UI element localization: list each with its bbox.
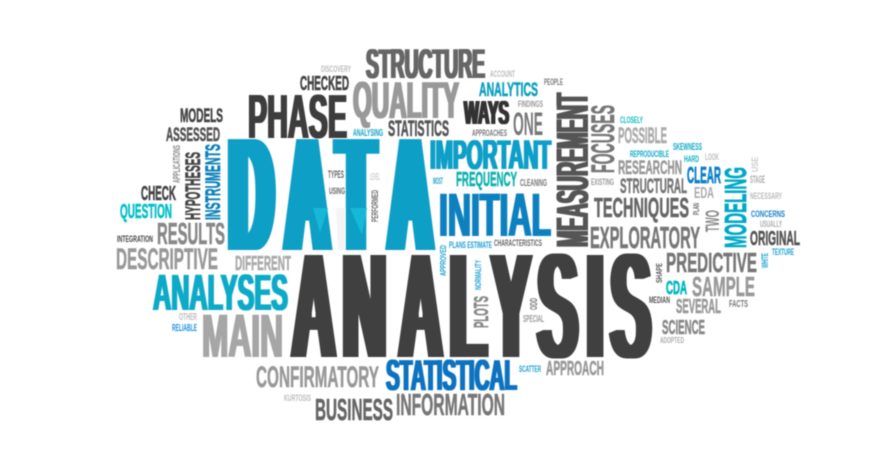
word: REPRODUCIBLE: REPRODUCIBLE bbox=[630, 149, 669, 159]
word cloud: data analysis: MOST bbox=[433, 176, 443, 186]
word: APPLICATIONS (vertical): APPLICATIONS bbox=[172, 145, 183, 183]
word cloud: data analysis: STRUCTURE bbox=[366, 40, 485, 87]
word: USING: USING bbox=[329, 186, 345, 196]
word cloud: data analysis: CLEAR bbox=[687, 162, 721, 188]
word cloud: data analysis: HYPOTHESES bbox=[182, 152, 205, 220]
word: SHAPE (vertical): SHAPE bbox=[655, 263, 664, 283]
word cloud: data analysis: ANALYSES bbox=[153, 264, 288, 321]
word cloud: data analysis: PHASE bbox=[248, 82, 347, 152]
word: LOOK: LOOK bbox=[705, 152, 719, 162]
word cloud: data analysis: QUALITY bbox=[353, 72, 459, 130]
word: ANALYSING: ANALYSING bbox=[353, 128, 383, 139]
word: APPROACHES: APPROACHES bbox=[472, 128, 507, 138]
word: USE (vertical): USE bbox=[750, 157, 760, 172]
word: MODELS: MODELS bbox=[180, 106, 223, 127]
word: PERFORMED (vertical): PERFORMED bbox=[370, 190, 380, 222]
word: PREDICTIVE: PREDICTIVE bbox=[666, 247, 757, 278]
word: EXISTING: EXISTING bbox=[591, 177, 614, 187]
word cloud: data analysis: POSSIBLE bbox=[618, 123, 667, 148]
word: PLANS ESTIMATE: PLANS ESTIMATE bbox=[449, 240, 492, 250]
word: CDA: CDA bbox=[666, 278, 687, 298]
word: CLEANING: CLEANING bbox=[520, 178, 547, 189]
word: SKEWNESS: SKEWNESS bbox=[673, 142, 702, 153]
main word: ANALYSIS: ANALYSIS bbox=[292, 219, 651, 392]
word cloud: data analysis: MODELING bbox=[718, 167, 753, 248]
word: OTHER: OTHER bbox=[179, 312, 197, 323]
word: INITIAL: INITIAL bbox=[439, 181, 551, 249]
word cloud: data analysis: CHECKED bbox=[300, 73, 349, 95]
word: PEOPLE: PEOPLE bbox=[544, 77, 563, 87]
word: CHARACTERISTICS: CHARACTERISTICS bbox=[494, 238, 542, 248]
word: APPROVED (vertical): APPROVED bbox=[439, 245, 448, 276]
watermark facets on DATA bbox=[313, 208, 367, 250]
word cloud: data analysis: TWO bbox=[703, 210, 724, 232]
word: WHITE (vertical): WHITE bbox=[760, 253, 770, 268]
word: KURTOSIS: KURTOSIS bbox=[284, 393, 311, 403]
word: APPROACH: APPROACH bbox=[546, 358, 604, 380]
word cloud: data analysis: DIFFERENT bbox=[235, 253, 291, 275]
word: TECHNIQUES: TECHNIQUES bbox=[594, 192, 689, 223]
word: RESEARCHN: RESEARCHN bbox=[618, 158, 682, 179]
word cloud: data analysis: STRUCTURAL bbox=[620, 175, 687, 198]
word cloud: data analysis: LEVEL bbox=[370, 172, 380, 183]
word cloud: data analysis: ONE bbox=[513, 106, 543, 142]
word: USUALLY: USUALLY bbox=[760, 219, 782, 229]
word: FACTS: FACTS bbox=[729, 299, 748, 310]
word: DISCOVERY: DISCOVERY bbox=[321, 64, 351, 74]
word: FINDINGS: FINDINGS bbox=[518, 99, 543, 109]
word: ANALYTICS: ANALYTICS bbox=[479, 80, 538, 101]
word cloud: data analysis: STATISTICAL bbox=[386, 352, 517, 400]
word cloud: data analysis: TYPES bbox=[328, 169, 344, 181]
word: SCATTER: SCATTER bbox=[519, 364, 541, 374]
word: CONFIRMATORY: CONFIRMATORY bbox=[256, 361, 379, 394]
word: CLOSELY: CLOSELY bbox=[620, 115, 643, 125]
word: INFORMATION: INFORMATION bbox=[396, 387, 505, 422]
word: MEDIAN: MEDIAN bbox=[649, 295, 670, 305]
word cloud: data analysis: FOCUSES bbox=[585, 105, 621, 173]
word: HARD: HARD bbox=[684, 154, 699, 164]
word cloud: data analysis: CHECK bbox=[141, 183, 176, 205]
word: SAMPLE: SAMPLE bbox=[692, 271, 755, 302]
word: ASSESSED: ASSESSED bbox=[166, 125, 220, 146]
main word: DATA: DATA bbox=[230, 101, 432, 288]
word cloud: data analysis: IMPORTANT bbox=[430, 131, 551, 178]
word cloud: data analysis: SPECIAL bbox=[523, 314, 544, 325]
word: EDA: EDA bbox=[694, 185, 714, 202]
word: ADOPTED: ADOPTED bbox=[660, 336, 684, 345]
word cloud: data analysis: BUSINESS bbox=[315, 392, 393, 427]
word: CONCERNS: CONCERNS bbox=[751, 209, 785, 219]
word: MAIN: MAIN bbox=[202, 302, 283, 370]
word: ACCOUNT: ACCOUNT bbox=[490, 69, 515, 79]
word: INSTRUMENTS (vertical): INSTRUMENTS bbox=[202, 144, 225, 220]
word cloud: data analysis: STATISTICS bbox=[388, 116, 449, 141]
word cloud: data analysis: RESULTS bbox=[157, 216, 225, 251]
word cloud: data analysis: EXPLORATORY bbox=[590, 220, 700, 255]
word: NECESSARY: NECESSARY bbox=[750, 191, 782, 201]
word cloud: data analysis: SCIENCE bbox=[662, 317, 705, 339]
word: RELIABLE: RELIABLE bbox=[172, 323, 197, 334]
word: INTEGRATION: INTEGRATION bbox=[117, 234, 153, 244]
word: TEXTURE: TEXTURE bbox=[772, 247, 794, 257]
word cloud: data analysis: QUESTION bbox=[120, 201, 172, 223]
word cloud: data analysis: STAGE bbox=[750, 174, 765, 186]
word: NORMALITY (vertical): NORMALITY bbox=[474, 260, 483, 290]
word: PLAN (vertical): PLAN bbox=[692, 203, 701, 215]
word cloud: data analysis: PLOTS bbox=[471, 296, 493, 328]
word: ORIGINAL: ORIGINAL bbox=[750, 228, 800, 250]
word: ODD (vertical): ODD bbox=[529, 298, 540, 310]
word: DESCRIPTIVE: DESCRIPTIVE bbox=[116, 243, 218, 276]
word cloud: data analysis: FREQUENCY bbox=[456, 169, 517, 191]
word cloud: data analysis: WAYS bbox=[464, 94, 509, 131]
word cloud: data analysis: SEVERAL bbox=[676, 296, 721, 318]
